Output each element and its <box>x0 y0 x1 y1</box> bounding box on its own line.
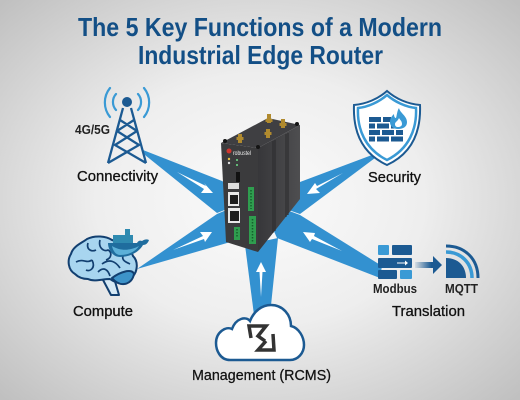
ray: management <box>245 238 278 315</box>
title: The 5 Key Functions of a Modern <box>78 12 442 42</box>
label: Management (RCMS): Management (RCMS) <box>192 367 331 384</box>
ethernet port 2 <box>228 208 240 223</box>
USB port <box>228 183 239 189</box>
icon: modbus blocks <box>378 245 412 279</box>
side face <box>258 125 300 252</box>
icon: brain with docker whale <box>69 229 149 295</box>
front face <box>221 143 258 252</box>
industrial router device: robustel <box>233 151 251 157</box>
label: Translation: Translation <box>392 303 465 320</box>
SD slot <box>236 172 240 182</box>
industrial router device <box>221 114 300 252</box>
ray: connectivity <box>143 150 250 213</box>
flame <box>390 108 407 129</box>
label: Security: Security <box>368 169 421 186</box>
firewall bricks <box>369 117 403 142</box>
status LEDs <box>228 158 238 166</box>
green terminal blocks <box>234 187 256 244</box>
label: Connectivity: Connectivity <box>77 168 158 185</box>
label: Modbus: Modbus <box>373 282 417 296</box>
ethernet port 1 <box>228 192 239 206</box>
brain <box>69 236 137 295</box>
arrow: translation <box>303 232 342 251</box>
title <box>78 12 442 70</box>
arrow: security <box>307 173 343 194</box>
docker whale <box>108 229 149 257</box>
title: Industrial Edge Router <box>138 40 383 70</box>
icon: management cloud <box>216 305 304 360</box>
ray: translation <box>260 200 382 278</box>
icon: security shield <box>354 91 420 165</box>
brand label <box>226 148 232 154</box>
ray: security <box>260 155 375 214</box>
label: Compute: Compute <box>73 303 133 320</box>
icon: mqtt signal <box>446 246 478 278</box>
arrow: modbus to mqtt <box>415 256 442 274</box>
label: 4G/5G: 4G/5G <box>75 123 110 137</box>
arrow: connectivity <box>177 172 213 193</box>
icon: cell tower <box>105 88 149 163</box>
blue rays with arrows <box>137 150 382 315</box>
arrow: management <box>256 262 266 297</box>
top face <box>221 118 300 148</box>
cloud logo <box>249 326 274 350</box>
antennas <box>236 114 286 143</box>
arrow: compute <box>173 232 212 250</box>
label: MQTT: MQTT <box>445 282 478 296</box>
ray: compute <box>137 200 250 269</box>
